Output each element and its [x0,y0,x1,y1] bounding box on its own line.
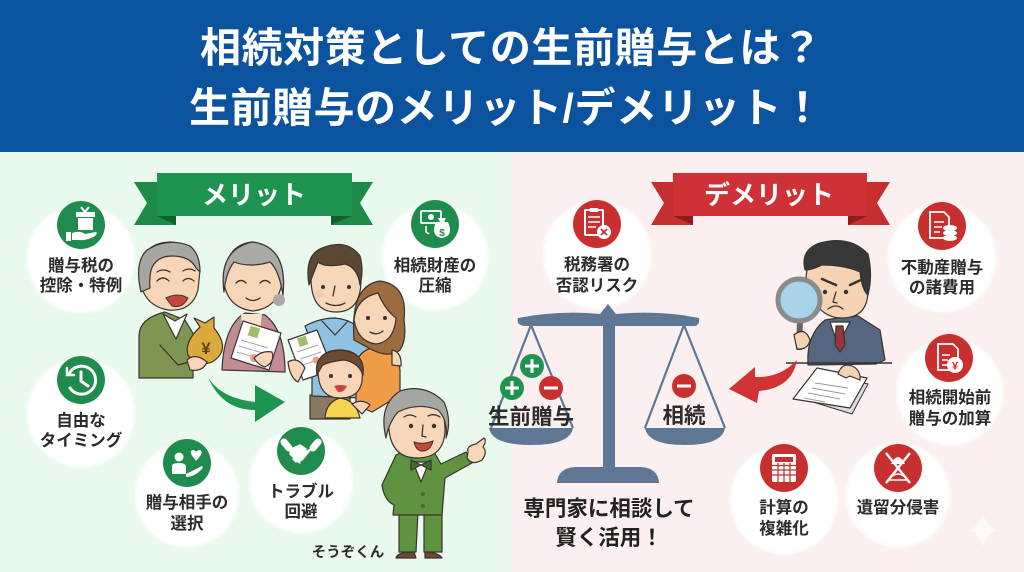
item: choice of recipient: 贈与相手の [146,492,228,512]
item: tax office denial risk [543,200,651,309]
icon: clipboard with x [585,208,611,239]
arrow: gift transfer [208,377,285,422]
item: avoiding trouble [249,427,353,533]
panel: demerit [488,173,1003,554]
item: avoiding trouble: 回避 [284,502,318,521]
item: free timing: 自由な [56,410,106,430]
mother [354,281,405,412]
item: estate compression [382,200,488,310]
item: calculation complexity [730,444,838,554]
item: free timing [27,356,135,467]
item: tax office denial risk: 税務署の [564,255,630,274]
ribbon: demerit: デメリット [704,180,834,210]
header band [0,0,1024,152]
item: real estate gift costs [888,202,996,312]
title: 生前贈与のメリット/デメリット！ [189,85,823,131]
illustration: family [288,244,405,419]
icon: document with yen: ¥ [952,360,959,372]
item: gift tax deduction: 贈与税の [48,255,114,275]
ribbon: merit: メリット [202,180,306,210]
title [189,25,823,131]
certificate held by father [288,330,333,382]
item: avoiding trouble: トラブル [268,481,334,501]
ribbon: demerit [651,173,890,225]
callout: consult a specialist [523,497,695,550]
callout: consult a specialist: 専門家に相談して [523,497,695,521]
panel: merit background [0,152,512,572]
icon: magnifier [778,279,820,350]
item: free timing: タイミング [40,430,123,450]
item: calculation complexity: 計算の [759,497,809,517]
balance scale [488,304,725,483]
item: choice of recipient: 選択 [170,514,204,533]
icon: document with coins [930,212,957,241]
label: Souzo-kun: そうぞくん [312,544,384,561]
item: calculation complexity: 複雑化 [759,518,809,538]
arrow: inspection pointing to inheritance [729,360,797,403]
panel: merit [27,173,488,561]
decorative sparkle [969,513,997,547]
left pan [488,354,574,445]
illustration: grandmother with certificate [222,242,285,372]
item: choice of recipient [135,439,239,547]
item: real estate gift costs: 不動産贈与 [901,257,983,277]
item: pre-inheritance gift addition [897,334,1003,445]
icon: money and bag: $ [439,228,445,239]
item: estate compression: 圧縮 [418,276,452,295]
scale strings [491,325,725,428]
icon: certificate [231,321,281,370]
icon: calculator [772,454,796,482]
item: gift tax deduction: 控除・特例 [40,275,122,295]
item: real estate gift costs: の諸費用 [909,278,975,297]
item: forced heirship infringement [846,443,950,547]
icon: yen money bag: ¥ [201,339,211,358]
icon: handshake [284,442,318,463]
item: gift tax deduction [27,201,135,313]
right pan: 相続 [662,404,706,428]
icon: person and heart [172,450,203,477]
character: Souzo-kun [312,389,485,561]
ribbon: merit [134,173,373,225]
desk line [786,362,892,364]
item: pre-inheritance gift addition: 相続開始前 [909,388,991,407]
left pan: 生前贈与 [488,405,574,429]
scale post and beam [518,304,699,483]
panel: demerit background [512,152,1024,572]
right pan [645,374,725,445]
child [316,350,370,418]
item: estate compression: 相続財産の [394,256,476,275]
item: tax office denial risk: 否認リスク [556,276,638,295]
item: pre-inheritance gift addition: 贈与の加算 [909,408,991,428]
icon: clock [67,366,96,394]
item: forced heirship infringement: 遺留分侵害 [857,498,939,517]
title: 相続対策としての生前贈与とは？ [200,25,822,71]
illustration: grandfather with money bag [139,242,223,378]
icon: gift in hand [66,207,97,241]
callout: consult a specialist: 賢く活用！ [555,526,663,550]
father [305,244,370,419]
icon: crossed hourglass [886,453,910,483]
papers [793,365,868,414]
illustration: inspector with magnifier [778,241,892,414]
